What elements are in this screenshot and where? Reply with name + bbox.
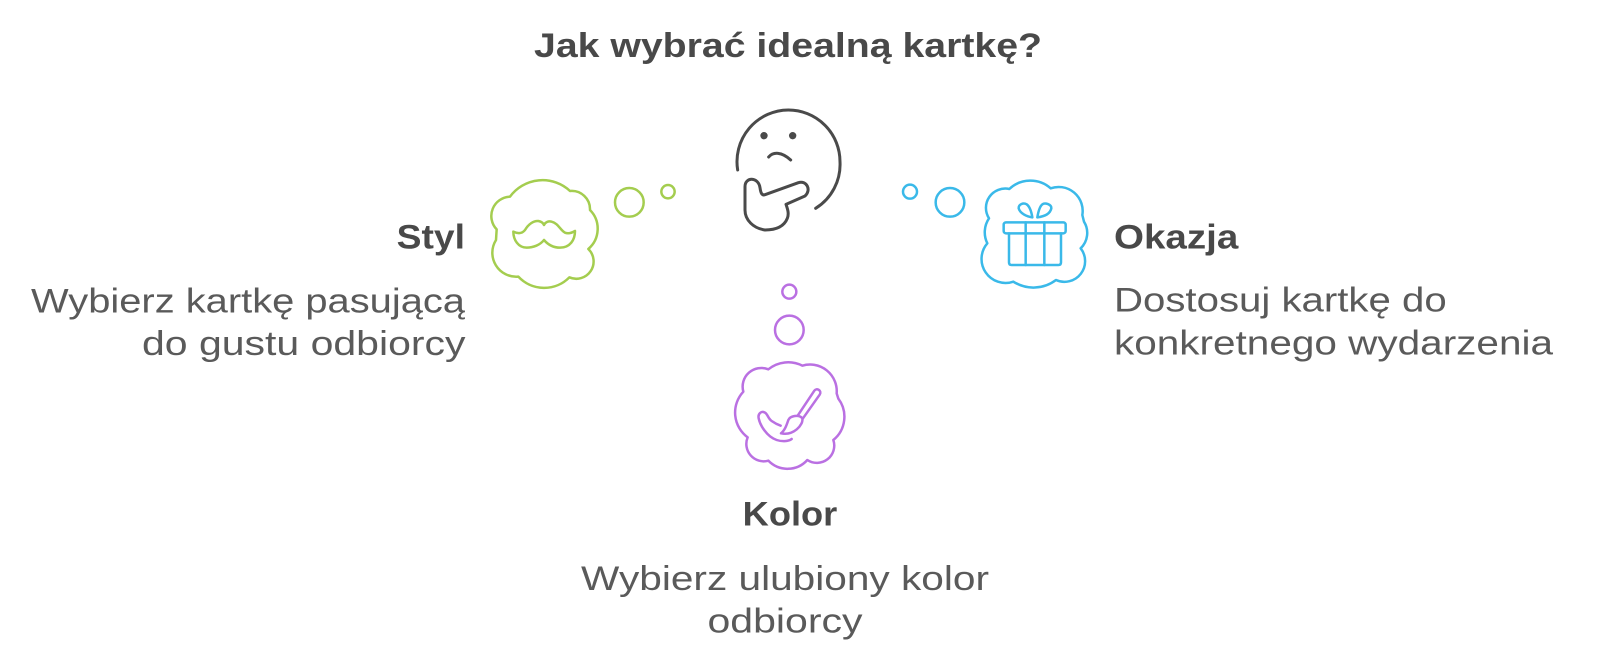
description: Okazja: Dostosuj kartkę do — [1114, 282, 1447, 320]
large bubble — [936, 188, 964, 217]
gift bow — [1019, 204, 1051, 217]
heading: Kolor: Kolor — [743, 496, 837, 534]
panel: Okazja — [903, 181, 1553, 362]
description: Styl — [31, 283, 466, 363]
brush head — [781, 416, 802, 434]
gift lid — [1004, 222, 1066, 233]
hand — [745, 179, 808, 230]
icon group: moustache thought bubble — [491, 180, 675, 288]
title: Jak wybrać idealną kartkę? — [534, 27, 1042, 65]
panel: Styl — [31, 180, 675, 363]
icon: thinking face — [737, 110, 840, 230]
description: Kolor: odbiorcy — [708, 602, 862, 640]
description: Kolor — [581, 560, 989, 640]
cloud outline — [735, 362, 844, 469]
gift ribbon — [1026, 222, 1044, 265]
moustache — [513, 221, 575, 248]
description: Kolor: Wybierz ulubiony kolor — [581, 560, 989, 598]
large bubble — [775, 316, 804, 344]
cloud outline — [491, 180, 598, 288]
right eye — [789, 132, 796, 139]
large bubble — [615, 188, 644, 217]
small bubble — [782, 285, 796, 299]
mouth — [769, 153, 791, 160]
face outline arc — [737, 110, 840, 208]
heading: Okazja: Okazja — [1114, 218, 1240, 256]
heading: Styl: Styl — [397, 218, 465, 256]
small bubble — [661, 185, 675, 198]
description: Okazja: konkretnego wydarzenia — [1114, 324, 1553, 362]
icon group: gift thought bubble — [903, 181, 1087, 288]
paint swoosh — [759, 412, 792, 441]
cloud outline — [982, 181, 1087, 288]
gift box — [1009, 233, 1061, 265]
description: Styl: Wybierz kartkę pasującą — [31, 283, 465, 321]
left eye — [760, 132, 768, 139]
small bubble — [903, 185, 917, 199]
brush handle — [798, 389, 820, 418]
icon group: paintbrush thought bubble — [735, 285, 844, 469]
panel: Kolor — [581, 285, 989, 640]
description: Okazja — [1114, 282, 1553, 362]
description: Styl: do gustu odbiorcy — [142, 325, 466, 363]
